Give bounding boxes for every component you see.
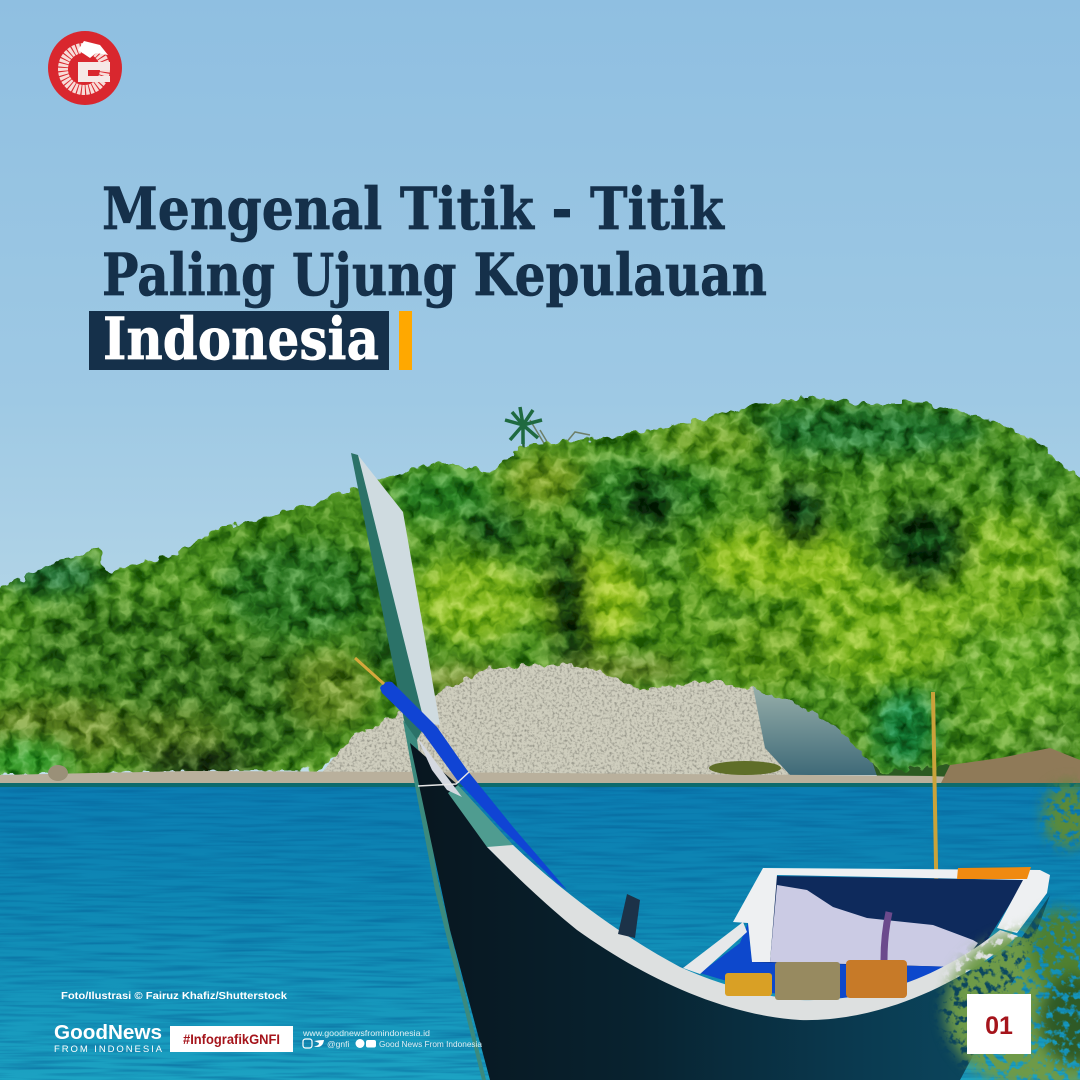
jerrycan spout [884,912,889,960]
white prow stripe [417,737,462,797]
page number: 01 [985,1012,1013,1040]
blue wrapped mast [380,682,567,890]
logo [48,31,122,105]
dark base under the tree line [860,700,1080,785]
boulder [48,765,68,781]
golden rod [355,658,384,684]
hashtag: #InfografikGNFI [183,1032,280,1047]
hashtag [170,1026,293,1052]
interior dark [750,876,1025,970]
orange cloth [957,867,1031,879]
title: Indonesia [103,305,379,373]
title [89,175,767,373]
title: Mengenal Titik - Titik [102,175,726,243]
deck white area [770,885,978,967]
hull [410,743,1050,1080]
cliff shadow [752,682,895,775]
sea [0,784,1080,1080]
teal strip on stem [403,720,486,1080]
title: Paling Ujung Kepulauan [102,241,767,309]
website and socials [302,1028,482,1049]
side rail [683,922,747,974]
title highlight box [89,311,389,370]
jerrycan orange [846,960,907,998]
foreground bush [945,783,1080,1080]
brand: GoodNews [54,1022,163,1055]
bamboo pole [933,692,938,980]
photo credit: Foto/Ilustrasi © Fairuz Khafiz/Shutterstock [61,990,287,1002]
orange bar [399,311,412,370]
website and socials: Good News From Indonesia [379,1039,482,1049]
prow sail board [351,453,440,725]
boat [351,453,1050,1080]
shoreline [0,771,1080,786]
forested hill [0,380,1080,800]
curved white rail [487,845,1018,1020]
cleat [618,894,640,938]
website and socials: www.goodnewsfromindonesia.id [302,1028,430,1038]
blue floor [725,962,960,998]
teal band under mast [448,785,557,888]
water line [0,783,1080,787]
website and socials: @gnfi [327,1039,349,1049]
rocky shore at right [940,748,1080,786]
page number [967,994,1031,1054]
bare tree branches [530,420,600,455]
bush on the shore [709,761,781,775]
brand: GoodNews: GoodNews [54,1022,162,1044]
blue side panel [700,923,752,985]
white frame [733,868,1050,962]
jerrycan yellow [725,973,772,996]
brand: GoodNews: FROM INDONESIA [54,1044,163,1055]
jerrycan khaki [775,962,840,1000]
background: sky [0,0,1080,800]
rope [418,772,469,786]
rocky cliff [320,660,890,775]
palm tree [505,407,542,470]
